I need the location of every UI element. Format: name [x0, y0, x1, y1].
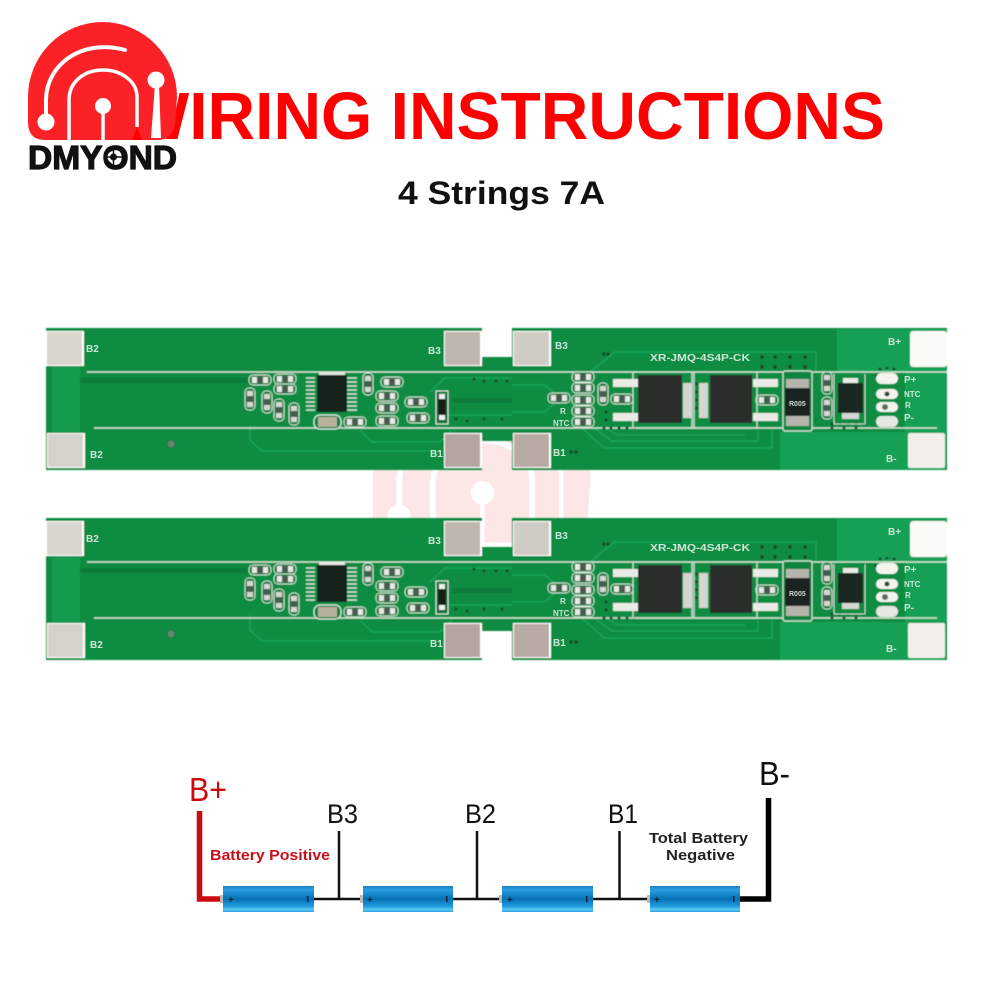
positive wire [200, 811, 223, 899]
board labels top: B- [886, 454, 897, 465]
title: WIRING INSTRUCTIONS [127, 79, 885, 154]
battery 2 [360, 886, 453, 912]
board labels bottom: B+ [888, 527, 901, 538]
board labels bottom: B3 [428, 536, 441, 547]
board labels top: B2 [86, 344, 99, 355]
board labels top: R [905, 401, 911, 410]
board labels top: R005 [789, 401, 806, 408]
icon: DMYOND logo: DMYOND [28, 139, 177, 176]
battery 4 [647, 886, 740, 912]
panel: circuit board bottom [46, 518, 947, 660]
board labels bottom: B- [886, 644, 897, 655]
label: total battery negative: Total Battery [649, 830, 749, 847]
board labels bottom: B2 [90, 640, 103, 651]
board labels top: NTC [553, 419, 570, 428]
wiring diagram [189, 755, 790, 912]
battery 1: + [228, 895, 234, 906]
label: B3: B3 [327, 799, 358, 829]
label: B-: B- [759, 755, 790, 792]
battery 1 [220, 886, 314, 912]
label: total battery negative: Negative [666, 847, 735, 864]
board labels bottom [86, 527, 921, 655]
board labels bottom: B1 [430, 639, 443, 650]
board labels bottom: R [905, 591, 911, 600]
board labels bottom: NTC [904, 580, 921, 589]
board labels top: XR-JMQ-4S4P-CK [650, 353, 751, 364]
battery 3 [499, 886, 593, 912]
board labels top: B3 [428, 346, 441, 357]
battery 3: + [507, 895, 513, 906]
board labels top: B2 [90, 450, 103, 461]
board labels bottom: B2 [86, 534, 99, 545]
board labels bottom: B3 [555, 531, 568, 542]
board labels bottom: XR-JMQ-4S4P-CK [650, 543, 751, 554]
board labels top: B1 [430, 449, 443, 460]
board labels top: NTC [904, 390, 921, 399]
battery 4: + [654, 895, 660, 906]
label: B1: B1 [608, 799, 638, 829]
battery 2: + [367, 895, 373, 906]
board labels bottom: R005 [789, 591, 806, 598]
panel: circuit board top [46, 328, 947, 470]
board labels top: B+ [888, 337, 901, 348]
board labels bottom: B1 [553, 638, 566, 649]
board labels bottom: R [560, 597, 566, 606]
board labels top: R [560, 407, 566, 416]
board labels bottom: P+ [904, 565, 917, 576]
board labels top: P+ [904, 375, 917, 386]
label: battery positive: Battery Positive [210, 847, 330, 864]
icon: DMYOND logo [28, 22, 177, 176]
board labels top [86, 337, 921, 465]
board labels bottom: NTC [553, 609, 570, 618]
board labels top: P- [904, 413, 914, 424]
watermark logo [373, 370, 590, 542]
label: B+: B+ [189, 771, 227, 808]
subtitle: 4 Strings 7A [398, 175, 605, 211]
board labels top: B3 [555, 341, 568, 352]
label: total battery negative [649, 830, 749, 864]
board labels top: B1 [553, 448, 566, 459]
negative wire [740, 798, 768, 899]
series wires [314, 898, 650, 900]
board labels bottom: P- [904, 603, 914, 614]
label: B2: B2 [465, 799, 496, 829]
